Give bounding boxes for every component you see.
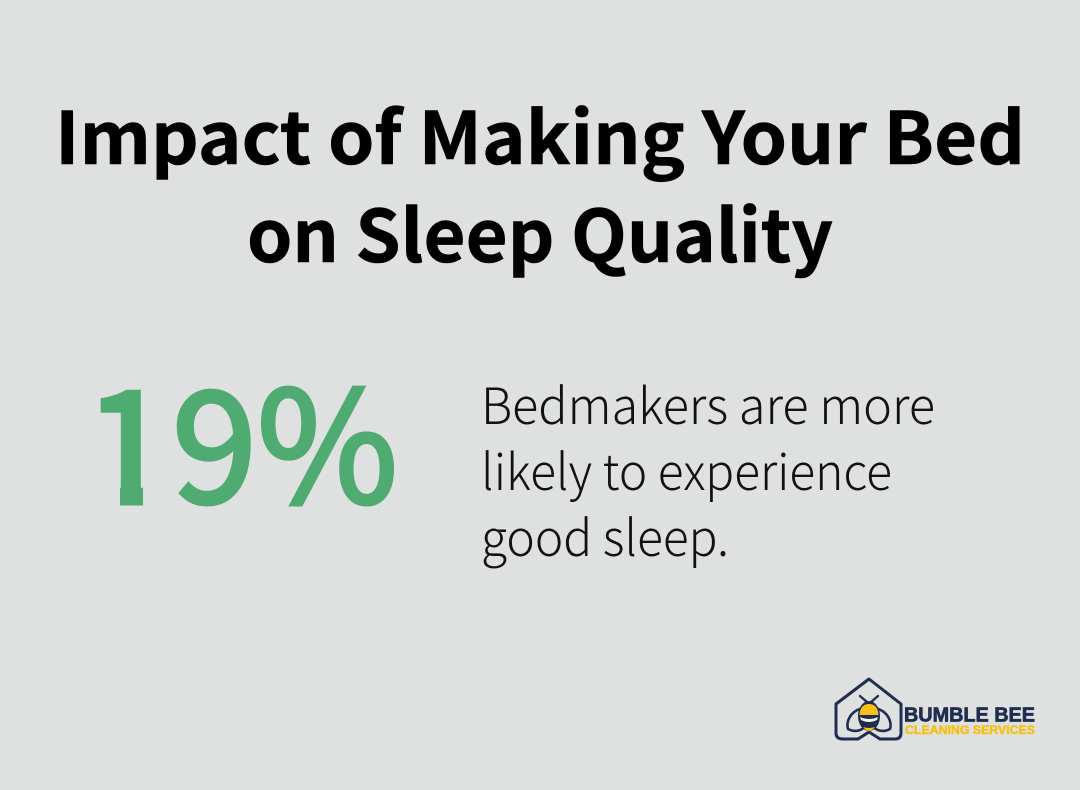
description text bbox=[481, 367, 935, 571]
statistic: 19%: 9% bbox=[172, 324, 398, 548]
logo tagline: CLEANING SERVICES bbox=[905, 723, 1035, 737]
title bbox=[55, 80, 1025, 283]
description text: likely to experience bbox=[481, 433, 892, 505]
statistic: 19%: 1 bbox=[85, 324, 170, 548]
icon: house outline with bee bbox=[836, 679, 901, 739]
description text: Bedmakers are more bbox=[481, 367, 935, 439]
title: on Sleep Quality bbox=[247, 178, 833, 283]
logo: Bumble Bee Cleaning Services bbox=[836, 679, 1035, 739]
logo wordmark: BUMBLE BEE bbox=[904, 704, 1035, 726]
title: Impact of Making Your Bed bbox=[55, 80, 1025, 185]
description text: good sleep. bbox=[481, 499, 729, 571]
